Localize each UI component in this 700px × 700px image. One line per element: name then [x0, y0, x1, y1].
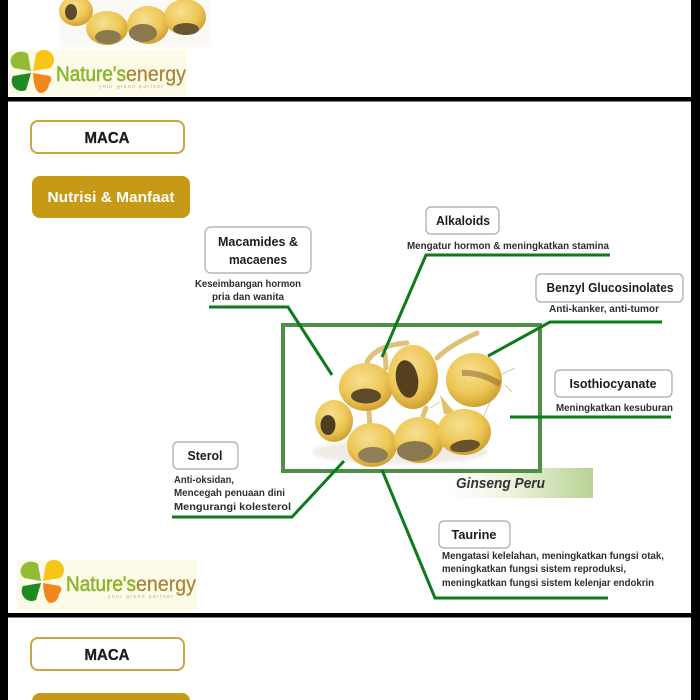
root stems — [367, 333, 477, 426]
callout: Alkaloids — [407, 207, 610, 252]
callout: Sterol: Mencegah penuaan dini — [174, 488, 285, 499]
top logo: Nature's energy: energy — [126, 63, 186, 86]
maca root: bottom left — [347, 423, 397, 467]
callout: Macamides & macaenes — [195, 227, 311, 303]
callout: Sterol: Mengurangi kolesterol — [174, 502, 291, 513]
maca root: top centre — [388, 345, 438, 409]
heading: Nutrisi & Manfaat — [32, 176, 190, 218]
callout: Taurine: meningkatkan fungsi sistem reproduksi, — [442, 564, 626, 575]
lower logo: Nature's energy: your green partner — [108, 594, 173, 600]
callout: Isothiocyanate: Meningkatkan kesuburan — [556, 403, 673, 414]
callout: Taurine: Mengatasi kelelahan, meningkatkan fungsi otak, — [442, 551, 664, 562]
callout: Taurine: meningkatkan fungsi sistem kelenjar endokrin — [442, 578, 654, 589]
callout: Taurine — [439, 521, 664, 589]
label band: Ginseng Peru: Ginseng Peru — [456, 476, 545, 492]
lower logo: Nature's energy: energy — [136, 573, 196, 596]
maca root: top left — [339, 363, 393, 411]
maca root: bottom right — [437, 395, 491, 455]
maca root: bottom centre — [394, 417, 444, 463]
callout: Benzyl Glucosinolates — [536, 274, 683, 315]
top panel: maca roots photo crop — [59, 0, 210, 47]
callout: Isothiocyanate: Isothiocyanate — [570, 377, 657, 391]
lower logo: Nature's energy — [17, 560, 197, 610]
callout: Taurine: Taurine — [452, 528, 497, 542]
maca root: small left — [315, 400, 353, 442]
callout: Macamides & macaenes: macaenes — [229, 253, 287, 267]
callout: Benzyl Glucosinolates: Anti-kanker, anti-tumor — [549, 304, 659, 315]
bottom heading: MACA — [31, 638, 184, 670]
bottom heading: MACA: MACA — [84, 647, 130, 664]
callout: Sterol: Anti-oksidan, — [174, 475, 234, 486]
callout: Sterol — [173, 442, 291, 513]
top logo: Nature's energy — [9, 50, 187, 96]
root shadows — [312, 440, 488, 464]
connector lines — [172, 255, 671, 598]
callout: Macamides & macaenes: Macamides & — [218, 235, 298, 249]
top logo: Nature's energy: Nature's — [56, 63, 126, 86]
photo panel: maca roots — [283, 325, 540, 471]
label band: Ginseng Peru — [450, 468, 593, 498]
root hairs — [430, 368, 515, 418]
callout: Sterol: Sterol — [188, 449, 222, 463]
heading: MACA — [31, 121, 184, 153]
heading: MACA: MACA — [84, 130, 130, 147]
maca root: top right — [446, 353, 502, 407]
callout: Benzyl Glucosinolates: Benzyl Glucosinolates — [546, 281, 674, 295]
callout: Macamides & macaenes: Keseimbangan hormon — [195, 279, 301, 290]
heading: Nutrisi & Manfaat: Nutrisi & Manfaat — [48, 189, 174, 206]
callout: Alkaloids: Alkaloids — [436, 214, 490, 228]
bottom heading: cropped gold bar — [32, 693, 190, 700]
callout: Macamides & macaenes: pria dan wanita — [212, 292, 285, 303]
callout: Isothiocyanate — [555, 370, 673, 414]
top logo: Nature's energy: your green partner — [99, 84, 163, 90]
lower logo: Nature's energy: Nature's — [66, 573, 136, 596]
callout: Alkaloids: Mengatur hormon & meningkatkan stamina — [407, 241, 610, 252]
